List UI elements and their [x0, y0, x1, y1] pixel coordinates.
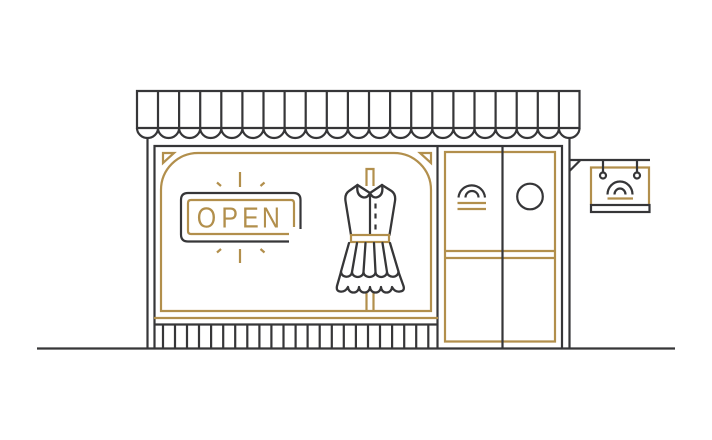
door logo gold lines: [458, 203, 486, 209]
sign bracket: [569, 160, 650, 171]
open sign: [181, 172, 300, 263]
dress placket and buttons: [370, 195, 376, 235]
shop frame: [154, 146, 562, 348]
base slats: [154, 324, 438, 348]
dress bodice: [345, 185, 395, 235]
door centre line: [501, 146, 504, 348]
awning canopy stripes: [137, 91, 580, 128]
shop window: [161, 153, 431, 311]
dress lower skirt: [337, 272, 404, 292]
OPEN lettering: OPEN: [197, 202, 280, 234]
dress collar: [357, 185, 382, 198]
sign logo gold line: [608, 197, 633, 200]
sign gold board: [591, 168, 649, 205]
sign gold inner outline: [188, 200, 294, 234]
ground line: [37, 347, 675, 350]
hanging shop sign: [569, 160, 650, 212]
sign rays: [217, 172, 264, 263]
dress on stand: [337, 169, 404, 311]
sign hook rings: [600, 172, 640, 178]
right corner ornament: [420, 153, 431, 163]
awning: [137, 91, 580, 138]
sign dark base: [591, 205, 650, 212]
awning scallops: [137, 128, 580, 138]
window sill: [154, 317, 438, 319]
window gold arch: [161, 153, 431, 311]
shop walls: [148, 138, 570, 348]
dress waist belt: [351, 235, 389, 242]
sign dark outline: [181, 193, 300, 242]
sign logo arches: [608, 182, 632, 194]
shop door: [445, 146, 555, 348]
left corner ornament: [163, 153, 174, 163]
door handle circle: [517, 184, 543, 209]
door logo arches: [458, 185, 485, 198]
mannequin pole: [366, 169, 374, 311]
sign hooks: [603, 160, 637, 172]
door gold panels: [445, 152, 555, 342]
dress upper skirt: [341, 243, 399, 277]
